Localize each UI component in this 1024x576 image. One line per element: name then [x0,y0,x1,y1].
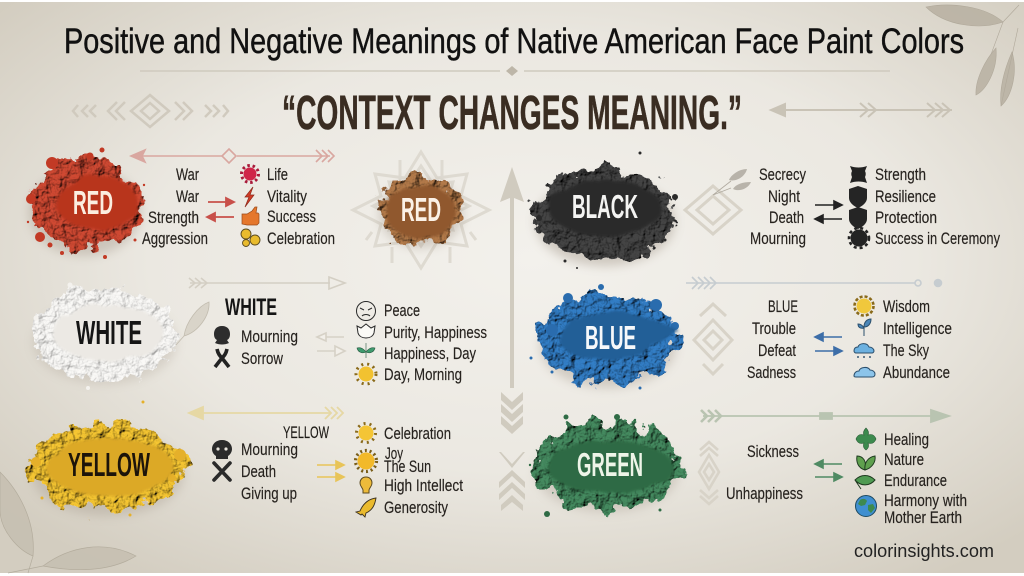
title divider [140,66,890,76]
positive meanings: Nature [884,450,924,469]
positive meanings: Day, Morning [384,365,462,384]
heading: YELLOW: YELLOW [283,423,329,442]
negative meanings: Night [768,187,800,206]
icon: strength [850,166,867,183]
positive meanings: Purity, Happiness [384,323,487,342]
label: RED: RED [401,191,441,228]
negative meanings [747,297,798,382]
negative meanings [241,327,298,368]
negative meanings: Death [241,462,276,481]
powder: black [533,152,678,269]
arrows [317,333,345,356]
star ornament [353,152,489,268]
icon: vitality bolt [245,187,254,207]
icon: healing clover [856,428,876,450]
negative meanings [142,165,208,248]
decorative arrow [189,277,345,289]
website credit: colorinsights.com [854,541,994,561]
icon: globe [856,496,876,516]
powder: blue [530,284,680,390]
icon: mourning figure [214,326,230,344]
label: BLUE: BLUE [585,319,636,356]
icon: feather [176,302,209,345]
panel: white powder meanings [33,277,487,390]
ornament: diamond [694,304,732,374]
positive meanings: Harmony with [884,491,967,510]
icon: resilience shield [849,186,867,208]
positive meanings: Peace [384,301,420,320]
powder: green [529,414,682,517]
decorative arrow [701,410,949,422]
icon: abundance cloud [854,367,875,377]
powder: red [26,148,145,259]
powder: yellow [30,400,186,516]
icon: skull [212,440,232,459]
positive meanings: Life [267,165,288,184]
positive meanings: Abundance [883,363,950,382]
negative meanings: BLUE [768,297,798,316]
negative meanings: War [176,187,199,206]
icon: the sun [356,450,376,472]
negative meanings: Defeat [758,341,796,360]
positive meanings: Mother Earth [884,508,962,527]
negative meanings: Giving up [241,484,297,503]
positive meanings [883,297,952,382]
negative meanings: Mourning [241,440,298,459]
icon: nature leaves [857,456,875,470]
icon: intelligence sprout [858,319,871,336]
positive meanings [384,424,463,517]
positive meanings: Celebration [384,424,451,443]
negative meanings: Mourning [750,229,806,248]
heading: WHITE: WHITE [225,294,277,321]
icon: ceremony badge [849,228,869,248]
panel: blue powder meanings [530,277,952,390]
positive meanings: Happiness, Day [384,344,476,363]
negative meanings: Aggression [142,229,208,248]
positive meanings: Endurance [884,471,947,490]
positive meanings: The Sun [384,457,431,476]
negative meanings [241,440,298,503]
panel: black powder meanings [533,152,1000,269]
icon: sprout [357,343,375,358]
positive meanings: Success [267,207,316,226]
icon: celebration [241,229,260,246]
icon: protection shield [849,207,867,229]
arrows [815,460,842,481]
negative meanings: War [176,165,199,184]
icon: celebration sun [356,424,376,442]
central vertical arrow [499,167,525,511]
label: WHITE: WHITE [76,314,142,351]
decorative arrow [131,149,334,163]
panel: yellow powder meanings [30,400,463,517]
negative meanings: Trouble [752,319,796,338]
arrows [317,461,344,481]
positive meanings: Generosity [384,498,448,517]
negative meanings: Sickness [747,442,799,461]
powder: white [33,282,177,390]
arrows [815,333,842,355]
negative meanings: Sorrow [241,349,284,368]
positive meanings [875,165,1000,248]
icon: crossed bones [214,463,230,480]
positive meanings [267,165,335,248]
icon: wisdom sun [854,296,874,316]
negative meanings [726,442,803,503]
negative meanings: Sadness [747,363,796,382]
negative meanings: Unhappiness [726,484,803,503]
icon: rocket [356,498,376,517]
arrows [815,201,842,223]
label: YELLOW: YELLOW [68,446,150,483]
negative meanings [750,165,806,248]
positive meanings: Strength [875,165,926,184]
decoration: bottom-left leaves [0,472,136,573]
icon: sorrow ribbon [215,349,229,367]
decoration: arrow [771,103,952,117]
label: RED: RED [73,184,113,221]
label: GREEN: GREEN [577,446,643,483]
icon: sad face [356,302,376,320]
positive meanings: Intelligence [883,319,952,338]
icon: light bulb [360,477,372,493]
icon: morning sun [356,364,376,384]
decorative arrow [189,407,343,419]
arrows [207,198,234,221]
decoration: top-right feathers [926,5,1019,106]
positive meanings: Joy [385,444,403,463]
positive meanings: Vitality [267,187,307,206]
positive meanings: Healing [884,430,929,449]
icon: endurance leaf [855,476,875,489]
positive meanings: Wisdom [883,297,930,316]
decoration: diamond pattern [73,95,228,127]
icon: life sun [242,166,258,182]
powder: brown [379,173,463,248]
positive meanings: Resilience [875,187,936,206]
negative meanings: Death [769,208,804,227]
ornament: chevrons [699,442,719,504]
positive meanings [384,301,487,384]
positive meanings: Protection [875,208,937,227]
icon: success thumb [242,207,259,225]
negative meanings: Strength [148,208,199,227]
negative meanings: Secrecy [759,165,806,184]
positive meanings: The Sky [883,341,929,360]
ornament: diamond and feathers [685,169,751,234]
positive meanings [884,430,967,527]
positive meanings: High Intellect [384,476,463,495]
panel: green powder meanings [529,410,967,527]
icon: sky cloud [854,344,874,358]
positive meanings: Celebration [267,229,335,248]
negative meanings: Mourning [241,327,298,346]
panel: earth red medallion [353,152,489,268]
icon: tulip [357,324,375,338]
panel: red powder meanings [26,148,335,259]
label: BLACK: BLACK [572,188,638,225]
decorative arrow [686,277,942,289]
